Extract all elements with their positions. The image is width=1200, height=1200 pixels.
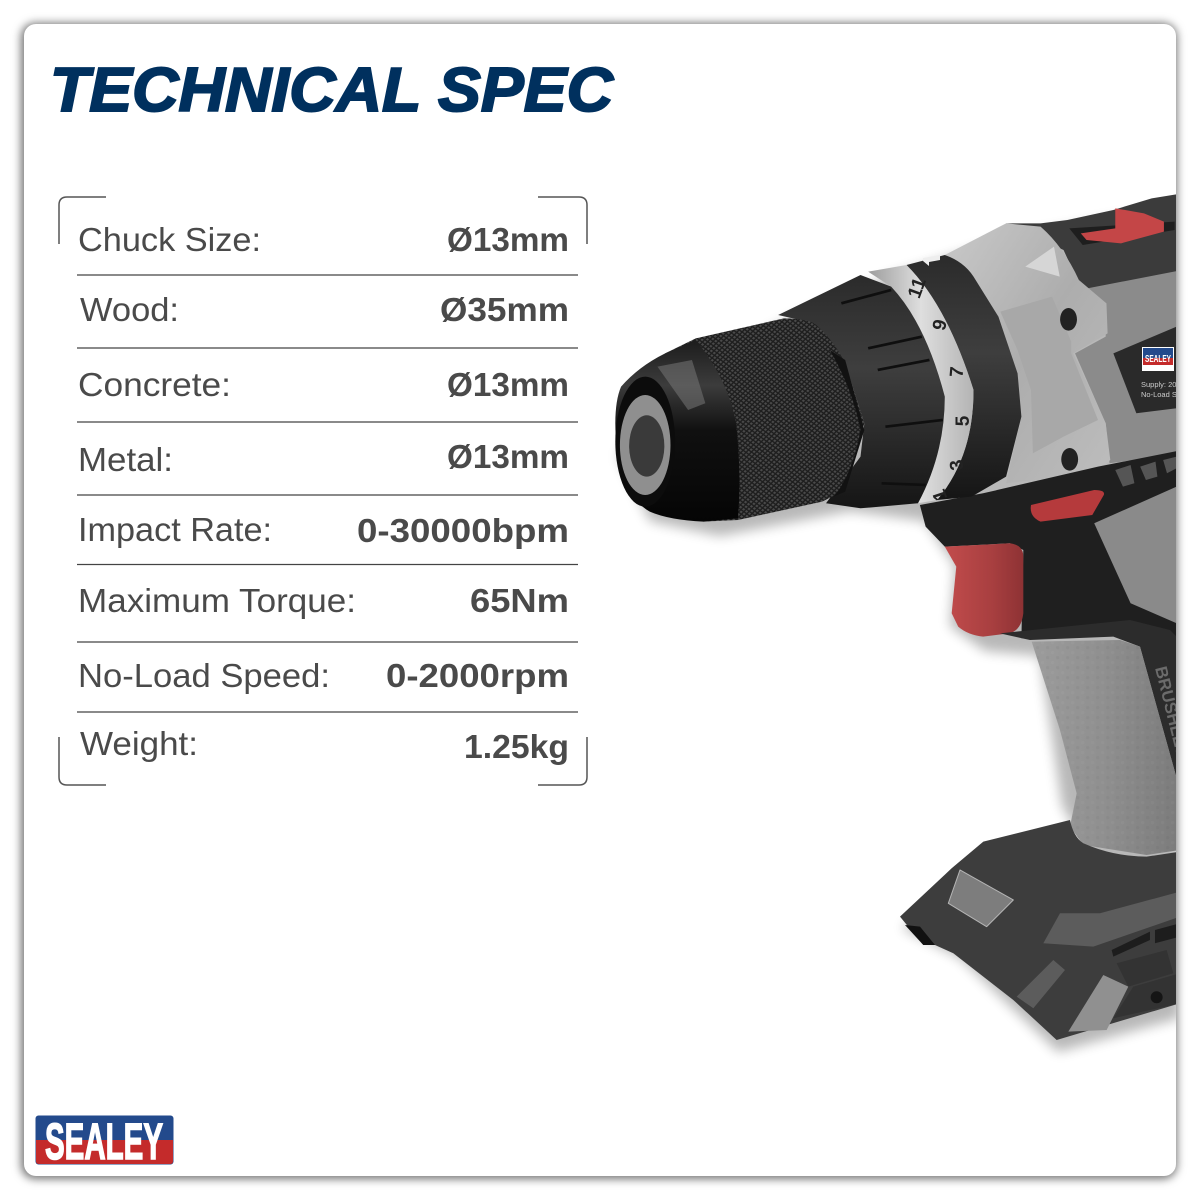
row: maximum torque: 65Nm xyxy=(470,582,569,619)
row: wood xyxy=(80,291,569,328)
silver dial ring xyxy=(868,265,974,503)
knurled sleeve xyxy=(665,318,864,522)
LED lens xyxy=(948,870,1013,927)
row: no-load speed: 0-2000rpm xyxy=(386,657,569,694)
trigger xyxy=(945,543,1023,637)
row dividers xyxy=(77,275,578,712)
grey grip xyxy=(1032,640,1180,855)
row: maximum torque: Maximum Torque: xyxy=(78,582,356,619)
dial arrow xyxy=(923,255,940,266)
front collar xyxy=(778,275,945,508)
row: maximum torque xyxy=(78,582,569,619)
spec table xyxy=(59,197,587,785)
logo: SEALEY: SEALEY xyxy=(45,1113,163,1170)
label text: No-Load Sp xyxy=(1141,390,1181,399)
row: concrete: Ø13mm xyxy=(447,366,569,403)
silver housing xyxy=(945,223,1110,483)
label text: Supply: 20V xyxy=(1141,380,1181,389)
row: wood: Ø35mm xyxy=(440,291,569,328)
dial numbers: 5 xyxy=(953,415,974,426)
image: cordless drill xyxy=(615,193,1195,1052)
selector window xyxy=(1069,222,1175,245)
collar ribs xyxy=(841,290,943,485)
grey body xyxy=(1075,270,1182,463)
frame corners xyxy=(59,197,587,785)
grip band xyxy=(1000,620,1180,790)
lower drill parts traced in zoom space xyxy=(900,620,1180,1040)
row: metal: Metal: xyxy=(78,441,173,478)
screws xyxy=(1060,308,1077,331)
row: chuck size xyxy=(78,221,569,258)
vent slots xyxy=(1115,457,1177,487)
grip texture xyxy=(1032,640,1180,855)
steel ring xyxy=(620,395,670,495)
outer rim xyxy=(615,377,675,507)
row: chuck size: Ø13mm xyxy=(447,221,569,258)
terminal clip xyxy=(1113,950,1180,1018)
brushless text: BRUSHLESS xyxy=(1151,664,1195,771)
base foot xyxy=(905,925,935,945)
row: concrete: Concrete: xyxy=(78,366,231,403)
label logo xyxy=(1142,347,1174,371)
sleeve inner bearing xyxy=(830,350,864,497)
red lock button xyxy=(1031,490,1104,522)
row: wood: Wood: xyxy=(80,291,179,328)
bore xyxy=(629,415,664,477)
hole xyxy=(1151,991,1163,1003)
drill shadow xyxy=(618,206,1180,1052)
row: chuck size: Chuck Size: xyxy=(78,221,261,258)
row: concrete xyxy=(78,366,569,403)
dial numbers: 1 xyxy=(929,486,952,503)
row: metal: Ø13mm xyxy=(447,438,569,475)
dial numbers: 9 xyxy=(929,318,952,332)
row: no-load speed: No-Load Speed: xyxy=(78,657,330,694)
label logo: SEALEY xyxy=(1145,354,1171,365)
grip upper xyxy=(1094,487,1177,623)
base highlights xyxy=(1017,892,1180,1008)
upper drill parts traced in zoom space xyxy=(615,193,1182,670)
row: metal xyxy=(78,438,569,478)
row: impact rate: 0-30000bpm xyxy=(357,512,569,549)
row: impact rate: Impact Rate: xyxy=(78,511,272,548)
grey plate xyxy=(1068,975,1128,1032)
row: no-load speed xyxy=(78,657,569,694)
dial numbers xyxy=(908,279,969,500)
nose cone xyxy=(615,340,739,522)
logo: SEALEY xyxy=(36,1113,174,1170)
dark top housing xyxy=(1006,193,1182,292)
row: weight: 1.25kg xyxy=(464,728,569,765)
row: weight xyxy=(80,725,569,765)
second collar xyxy=(906,255,1021,500)
row: weight: Weight: xyxy=(80,725,198,762)
slot xyxy=(1112,923,1180,957)
handle xyxy=(920,451,1176,638)
title: TECHNICAL SPEC xyxy=(50,56,614,125)
dial numbers: 3 xyxy=(946,458,969,472)
label plate xyxy=(1113,327,1177,413)
housing facets xyxy=(1000,297,1098,453)
dial numbers: 11 xyxy=(904,275,931,301)
red selector slider xyxy=(1081,208,1164,243)
row: impact rate xyxy=(78,511,569,549)
battery base xyxy=(900,820,1180,1040)
dial numbers: 7 xyxy=(947,366,968,378)
nose highlight xyxy=(657,360,705,410)
label text xyxy=(1141,382,1176,397)
